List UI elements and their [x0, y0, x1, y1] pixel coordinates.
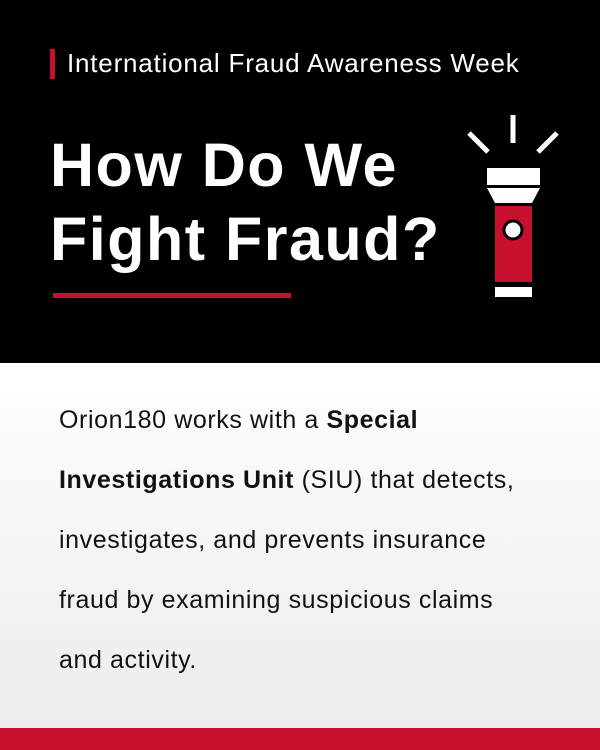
body text: Orion180 works with a Special	[59, 406, 418, 434]
body panel	[0, 363, 600, 728]
title: Fight Fraud?	[50, 205, 441, 273]
bottom red bar	[0, 728, 600, 750]
body text: and activity.	[59, 646, 197, 674]
body text: investigates, and prevents insurance	[59, 526, 486, 554]
title underline	[53, 293, 291, 298]
body text	[59, 406, 514, 674]
title	[50, 131, 441, 273]
header panel	[0, 0, 600, 363]
title: How Do We	[50, 131, 398, 199]
body text: fraud by examining suspicious claims	[59, 586, 493, 614]
subtitle with red marker: International Fraud Awareness Week	[67, 48, 520, 78]
body text: Investigations Unit (SIU) that detects,	[59, 466, 514, 494]
icon: flashlight	[467, 115, 559, 297]
